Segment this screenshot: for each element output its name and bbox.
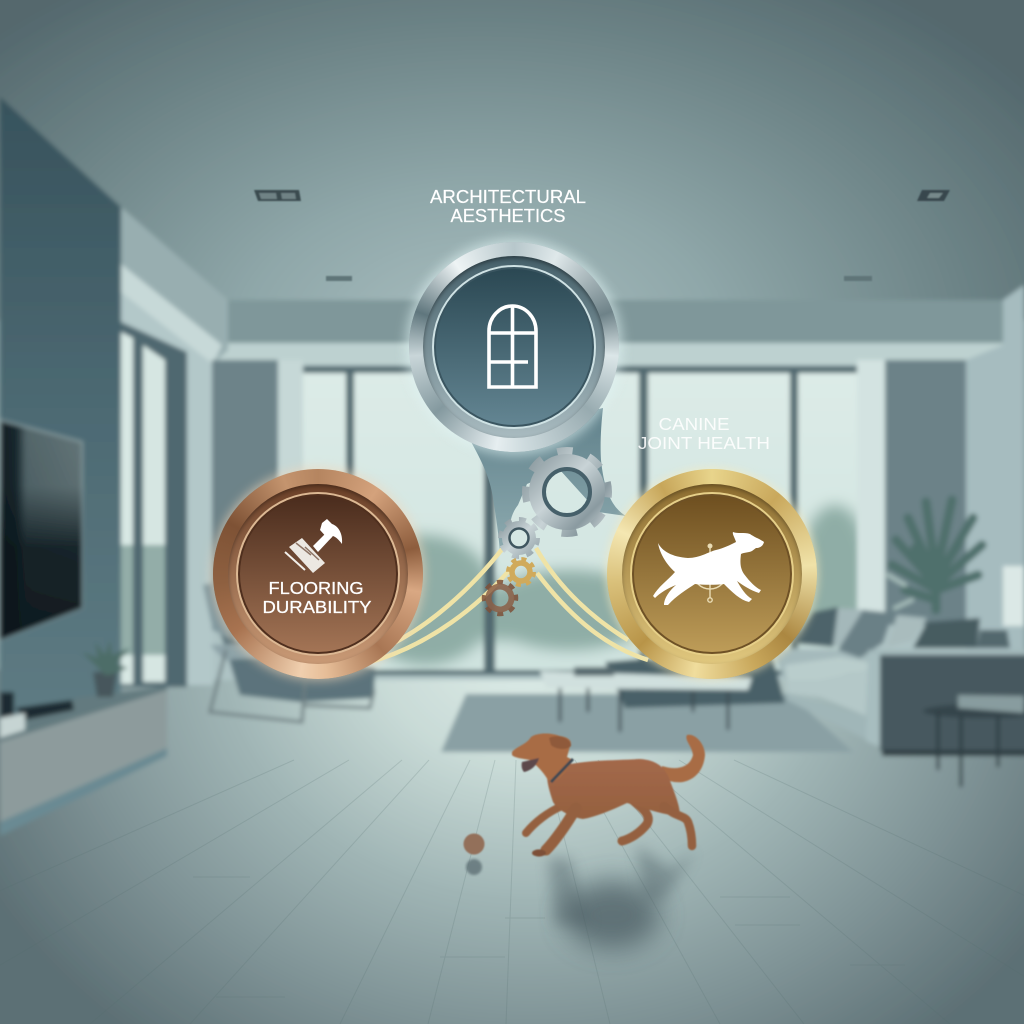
wall TV (0, 420, 82, 640)
medallion: canine joint health (607, 469, 817, 679)
metal stem connector (469, 408, 626, 552)
dog shadow (548, 845, 695, 949)
golden connector bands (370, 548, 648, 662)
label: canine joint health: CANINE (658, 414, 730, 434)
light band under beam (215, 343, 1005, 365)
sofa (605, 607, 1024, 756)
dog near front leg (546, 808, 576, 850)
ball (464, 834, 484, 875)
dog tongue (522, 758, 539, 772)
dog far front leg (526, 806, 562, 833)
label: canine joint health: JOINT HEALTH (638, 433, 770, 453)
small steel gear (500, 520, 538, 556)
ceiling (0, 0, 1024, 320)
side table with books (923, 695, 1024, 787)
label: architectural aesthetics (430, 187, 586, 226)
large steel gear (519, 444, 615, 540)
dog near hind leg (664, 806, 692, 846)
icon: hammer on plank (285, 519, 342, 573)
label: architectural aesthetics: ARCHITECTURAL (430, 187, 586, 207)
right wall (966, 285, 1024, 660)
TV cabinet (0, 689, 167, 822)
plant on cabinet (82, 640, 130, 697)
window panes (300, 368, 858, 673)
dog running on floor (512, 734, 705, 857)
left soffit (121, 207, 228, 362)
coffee table (540, 667, 752, 732)
dog ear (549, 736, 571, 749)
icon: arched window (487, 304, 538, 389)
icon: running dog silhouette (653, 532, 764, 605)
armchair (203, 582, 375, 722)
label: flooring durability: FLOORING (268, 578, 364, 598)
dog far hind leg (622, 798, 648, 841)
dog collar (551, 759, 573, 782)
ceiling lights (254, 190, 950, 281)
label: canine joint health (638, 414, 770, 453)
label: flooring durability (262, 578, 372, 617)
small bronze gear (481, 579, 519, 617)
floor planks (0, 760, 1024, 1024)
devices on cabinet (0, 692, 74, 720)
back wall (213, 340, 1024, 680)
icon: joint target crosshair (693, 544, 727, 602)
dog head (512, 734, 573, 781)
medallion: architectural aesthetics (409, 242, 619, 452)
left column and windows (121, 260, 213, 685)
window frames (300, 366, 857, 675)
left curtains (212, 360, 278, 630)
label: flooring durability: DURABILITY (262, 597, 372, 617)
label: architectural aesthetics: AESTHETICS (450, 206, 566, 226)
dog tail (662, 735, 705, 782)
left wall (0, 97, 121, 738)
medallion: flooring durability (213, 469, 423, 679)
rug (441, 694, 853, 752)
small gold gear (508, 559, 534, 585)
dog body (547, 759, 680, 819)
ceiling beam (218, 300, 1003, 343)
floor plant (888, 500, 982, 610)
trees outside (354, 505, 870, 665)
right curtains (857, 360, 885, 620)
floor (0, 670, 1024, 1024)
